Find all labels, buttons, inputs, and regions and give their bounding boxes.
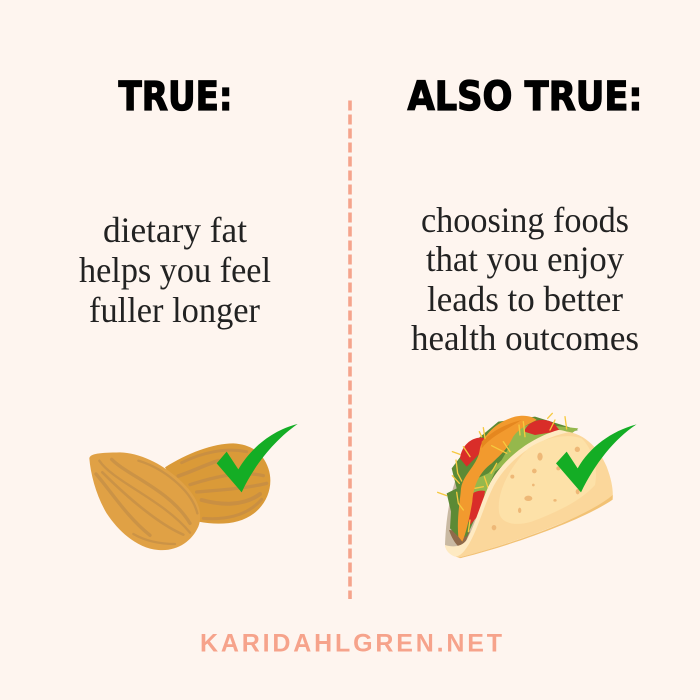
check mark <box>556 424 637 492</box>
tortilla highlight <box>499 436 596 524</box>
text block: left statement: dietary fat <box>103 210 247 250</box>
text block: left statement: fuller longer <box>89 290 260 330</box>
divider: dashed line <box>348 100 352 599</box>
shell back <box>445 472 492 553</box>
heading: ALSO TRUE: ALSO TRUE: <box>408 74 642 120</box>
lettuce <box>447 417 578 537</box>
text block: left statement <box>79 210 271 330</box>
tortilla <box>445 431 613 558</box>
footer: website: KARIDAHLGREN.NET <box>200 630 502 658</box>
text block: right statement: leads to better <box>427 279 623 319</box>
icon: taco <box>438 413 637 558</box>
check mark <box>217 424 298 492</box>
text block: right statement: choosing foods <box>421 200 629 240</box>
back almond <box>165 443 270 524</box>
tortilla spots <box>492 447 580 530</box>
text block: right statement <box>411 200 639 358</box>
orange sauce <box>458 416 537 542</box>
icon: almonds <box>89 424 298 550</box>
tomatoes <box>460 438 488 467</box>
text block: right statement: health outcomes <box>411 318 639 358</box>
tortilla shadow <box>458 495 613 558</box>
heading: TRUE: TRUE: <box>118 74 232 120</box>
text block: left statement: helps you feel <box>79 250 271 290</box>
cheese shreds <box>438 413 567 532</box>
text block: right statement: that you enjoy <box>426 239 624 279</box>
front almond <box>89 452 200 550</box>
tortilla lip <box>445 430 568 557</box>
